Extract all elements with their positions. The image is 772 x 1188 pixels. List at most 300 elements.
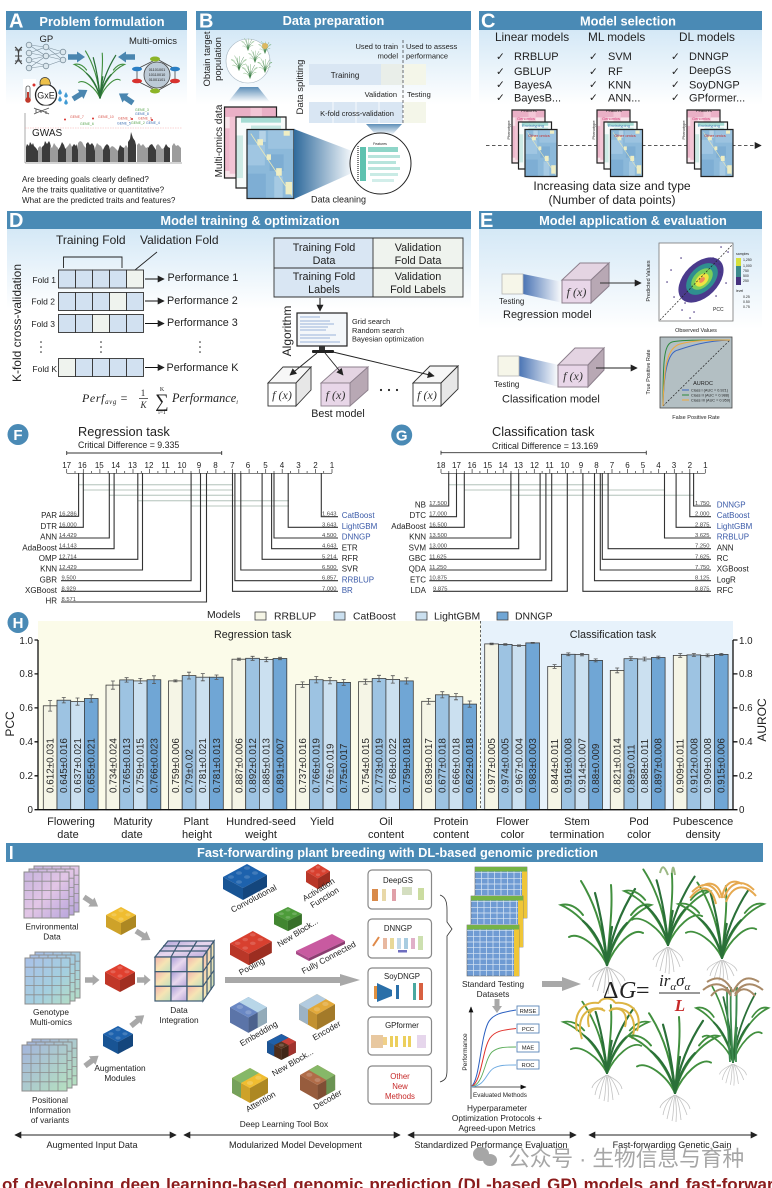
- data stack 1: Other omics: [528, 133, 550, 138]
- left rank values G: 11.250: [429, 565, 447, 571]
- method box other new methods: Other: [390, 1072, 410, 1081]
- right rank values G: 7.625: [695, 554, 710, 560]
- rank axis F: 17: [62, 461, 72, 470]
- x axis trait labels: date: [57, 829, 79, 841]
- method box SoyDNGP: [368, 968, 432, 1007]
- label obtain target population: Obtain target: [202, 31, 213, 86]
- method box DeepGS: [368, 870, 432, 909]
- formula perf avg: i: [236, 400, 238, 406]
- performance chart: Performance: [462, 1033, 469, 1071]
- genetic gain formula: =: [636, 978, 650, 1004]
- right axis ticks: [739, 636, 753, 816]
- right rank values G: [695, 501, 710, 592]
- scatter plot: PCC: [713, 307, 724, 313]
- method box SoyDNGP: SoyDNGP: [384, 972, 420, 981]
- fold row labels: Fold 3: [31, 319, 55, 329]
- regression model flow: Regression model: [503, 309, 592, 321]
- x axis trait labels: Protein: [434, 816, 468, 828]
- bar value labels: 0.737±0.016: [298, 738, 309, 793]
- left method names G: [391, 500, 427, 595]
- rank axis F: 16: [78, 461, 87, 470]
- data stack 2: Envirotyping: [608, 123, 630, 128]
- data stack 1: Features: [521, 108, 537, 113]
- main arrow: [225, 974, 360, 986]
- GWAS Manhattan plot: GENE_2: [131, 121, 145, 125]
- linear models list: BayesB...: [514, 92, 561, 104]
- performance labels: Performance 3: [167, 317, 238, 329]
- icon: GxE environment: [23, 77, 68, 106]
- title F: Regression task: [78, 424, 170, 439]
- bar value labels: 0.897±0.008: [654, 738, 665, 793]
- GWAS Manhattan plot: GENE_8: [135, 112, 149, 116]
- header B: [196, 10, 471, 32]
- panel A: problem formulation: [6, 10, 187, 208]
- x axis trait labels: Yield: [310, 816, 334, 828]
- header E: E: [480, 210, 493, 232]
- left method names G: GBC: [409, 554, 426, 563]
- bar value labels: 0.759±0.006: [171, 738, 182, 793]
- x axis trait labels: Plant: [183, 816, 209, 828]
- x axis trait labels: content: [368, 829, 404, 841]
- rank axis G: 10: [561, 461, 570, 470]
- x axis trait labels: Pod: [629, 816, 649, 828]
- performance labels: Performance K: [166, 362, 239, 374]
- bar value labels: 0.915±0.006: [717, 738, 728, 793]
- left method names G: DTC: [410, 511, 426, 520]
- linear models list: ✓: [496, 92, 505, 104]
- label data integration: [159, 1005, 199, 1025]
- population circle: [226, 38, 272, 83]
- right axis ticks: 0.4: [739, 737, 753, 748]
- scatter plot: 750: [743, 269, 749, 273]
- rank axis G: 11: [545, 461, 554, 470]
- rank axis F: [62, 461, 335, 473]
- fold data table: Validation: [395, 242, 441, 254]
- bar value labels: 0.781±0.013: [212, 738, 223, 793]
- badge F: [8, 424, 28, 445]
- left rank lines G: [429, 473, 567, 591]
- formula perf avg: K: [139, 400, 147, 410]
- badge G: G: [396, 428, 408, 444]
- bar value labels: 0.637±0.021: [73, 738, 84, 793]
- axis label k-fold: K-fold cross-validation: [10, 264, 24, 382]
- data stack 3: Features: [696, 108, 712, 113]
- left axis ticks: 0.2: [19, 771, 33, 782]
- x axis trait labels: date: [121, 829, 143, 841]
- splitting rows: [309, 40, 458, 124]
- stage labels: Augmented Input Data: [46, 1140, 138, 1150]
- left rank values F: [59, 511, 78, 603]
- optimization methods: [352, 317, 424, 344]
- left axis ticks: 0.4: [19, 737, 34, 748]
- rank axis G: 6: [625, 461, 630, 470]
- rank axis G: 7: [610, 461, 615, 470]
- legend: [207, 610, 553, 622]
- rank axis G: 13: [514, 461, 523, 470]
- linear models list: Linear models: [495, 30, 569, 44]
- scatter plot: 0.50: [743, 300, 750, 304]
- data stack 1: Envirotyping: [522, 123, 544, 128]
- rank axis G: 15: [483, 461, 493, 470]
- right method names F: [342, 511, 378, 595]
- critical difference F: [67, 440, 222, 455]
- formula perf avg: 1: [141, 388, 145, 398]
- questions text: [22, 175, 176, 205]
- bar value labels: 0.977±0.005: [487, 738, 498, 793]
- left method names F: OMP: [39, 554, 57, 563]
- data stack 3: Genomics: [692, 116, 710, 121]
- fold row labels: Fold K: [32, 364, 57, 374]
- y axis PCC: PCC: [3, 711, 17, 737]
- label standard testing datasets: Datasets: [477, 989, 509, 999]
- data stack 2: [591, 108, 642, 176]
- GWAS Manhattan plot: GWAS: [32, 128, 63, 139]
- ROC plot: Class I (AUC = 0.921): [691, 388, 729, 392]
- left rank values G: 11.625: [429, 554, 447, 560]
- linear models list: RRBLUP: [514, 51, 559, 63]
- bar value labels: 0.892±0.012: [248, 738, 259, 793]
- critical difference G: Critical Difference = 13.169: [492, 441, 598, 451]
- DL models list: ✓: [671, 66, 680, 78]
- ROC plot: False Positive Rate: [672, 415, 720, 421]
- bar value labels: 0.768±0.022: [388, 738, 399, 793]
- badge H: H: [13, 615, 23, 632]
- arrows to performance: [145, 279, 164, 368]
- label algorithm: Algorithm: [280, 306, 294, 356]
- label deep learning tool box: Deep Learning Tool Box: [240, 1119, 329, 1129]
- candidate model boxes: f (x): [272, 388, 292, 402]
- method box other new methods: New: [392, 1082, 408, 1091]
- bar value labels: 0.677±0.018: [438, 738, 449, 793]
- GWAS Manhattan plot: GENE_5: [117, 122, 131, 126]
- panel C: model selection: [479, 10, 762, 207]
- rank axis F: 14: [111, 461, 121, 470]
- icon: multi-omics network: 01101001: [149, 68, 165, 72]
- caption data size: (Number of data points): [548, 193, 676, 207]
- scatter plot: samples: [736, 252, 749, 256]
- bar value labels: 0.639±0.017: [424, 738, 435, 793]
- label genotype: Genotype: [33, 1007, 69, 1017]
- DL models list: [671, 30, 745, 104]
- bar value labels: 0.983±0.003: [528, 738, 539, 793]
- GWAS Manhattan plot: GENE_3: [135, 108, 149, 112]
- label positional: [29, 1095, 71, 1125]
- splitting rows: K-fold cross-validation: [320, 109, 394, 118]
- linear models list: ✓: [496, 51, 505, 63]
- rank axis F: 13: [128, 461, 137, 470]
- tool box labels: New Block...: [270, 1047, 315, 1078]
- bar value labels: 0.888±0.011: [640, 738, 651, 793]
- DL models list: GPformer...: [689, 92, 745, 104]
- right method names F: RFR: [342, 554, 358, 563]
- scatter plot: Observed Values: [675, 328, 717, 334]
- candidate model boxes: f (x): [417, 388, 437, 402]
- linear models list: ✓: [496, 79, 505, 91]
- environmental data grids: [24, 866, 79, 918]
- genetic gain formula: α: [670, 981, 676, 993]
- left method names G: KNN: [409, 532, 426, 542]
- right method names F: RRBLUP: [342, 576, 374, 584]
- dashed trend arrow: [486, 144, 761, 146]
- feature matrix lens: [350, 133, 411, 194]
- header A: [6, 10, 187, 32]
- left method names G: AdaBoost: [391, 522, 427, 531]
- header I: [6, 843, 763, 862]
- right rank values G: 8.875: [695, 586, 710, 592]
- header A: Problem formulation: [39, 14, 165, 29]
- panel I: fast-forwarding plant breeding: [6, 843, 768, 1150]
- method box DNNGP: DNNGP: [384, 924, 412, 933]
- clique bars F: [78, 485, 289, 506]
- rank axis F: 2: [313, 461, 318, 470]
- tool box labels: [229, 875, 358, 1114]
- tool box labels: Function: [308, 885, 341, 910]
- GWAS Manhattan plot: GENE_7: [70, 115, 84, 119]
- fold row labels: [31, 275, 57, 374]
- header E: [479, 210, 762, 232]
- task labels: Classification task: [570, 629, 657, 641]
- fold labels: Training Fold: [56, 233, 126, 247]
- header B: Data preparation: [283, 13, 385, 28]
- rank axis F: 7: [230, 461, 235, 470]
- linear models list: [495, 30, 569, 104]
- left method names F: AdaBoost: [22, 544, 58, 552]
- splitting rows: performance: [406, 52, 448, 60]
- label environmental data: [25, 922, 79, 942]
- label multi-omics data: Multi-omics data: [214, 104, 225, 177]
- left rank values G: 17.500: [429, 501, 447, 507]
- label genotype: [30, 1007, 72, 1027]
- genetic gain formula: ir: [659, 971, 670, 990]
- fold labels: [56, 233, 218, 247]
- linear models list: GBLUP: [514, 66, 551, 78]
- bar value labels: 0.75±0.017: [339, 744, 350, 793]
- DL models list: SoyDNGP: [689, 80, 740, 92]
- performance labels: Performance 1: [168, 272, 238, 284]
- method box GPformer: GPformer: [385, 1021, 419, 1030]
- legend: Models: [207, 610, 240, 621]
- bar value labels: 0.622±0.018: [465, 738, 476, 793]
- legend: LightGBM: [434, 612, 480, 622]
- genetic gain formula: L: [674, 996, 685, 1015]
- left rank values G: 16.500: [429, 522, 447, 528]
- label GP: GP: [40, 34, 53, 45]
- right rank values F: 4.643: [322, 544, 337, 550]
- left method names F: KNN: [40, 564, 57, 574]
- bar value labels: 0.967±0.004: [514, 738, 525, 793]
- right rank values F: 3.643: [322, 522, 337, 528]
- bar value labels: 0.759±0.018: [402, 738, 413, 793]
- splitting rows: Training: [331, 71, 359, 80]
- data stack 2: Genomics: [602, 116, 620, 121]
- bar value labels: [46, 738, 728, 793]
- label augmentation modules: Augmentation: [94, 1063, 146, 1073]
- header C: [479, 10, 762, 32]
- optimization methods: Random search: [352, 326, 404, 335]
- fold data table: Training Fold: [293, 242, 355, 254]
- x axis trait labels: weight: [244, 829, 277, 841]
- header D: D: [9, 210, 23, 232]
- left method names G: ETC: [410, 576, 426, 584]
- genetic gain formula: σ: [676, 971, 685, 990]
- regression model flow: f (x): [567, 285, 586, 299]
- rank axis G: 14: [499, 461, 508, 470]
- right axis ticks: 0: [739, 805, 745, 816]
- scatter plot: 1,250: [743, 258, 752, 262]
- axes: [34, 640, 738, 810]
- label hyperparameter: Agreed-upon Metrics: [458, 1123, 536, 1133]
- label positional: Positional: [32, 1095, 68, 1105]
- header C: Model selection: [580, 14, 676, 28]
- bar value labels: 0.916±0.008: [564, 738, 575, 793]
- right rank values G: 2.000: [695, 512, 710, 518]
- x axis trait labels: Flower: [496, 816, 529, 828]
- right method names G: DNNGP: [717, 500, 746, 510]
- data stack 1: Genomics: [517, 116, 535, 121]
- performance chart: RMSE: [520, 1009, 537, 1015]
- fold rows: [58, 270, 144, 376]
- fold labels: Validation Fold: [140, 233, 218, 247]
- optimization methods: Grid search: [352, 317, 390, 326]
- ROC plot: [646, 337, 732, 421]
- right method names F: CatBoost: [342, 511, 375, 520]
- tool box labels: Decoder: [311, 1087, 344, 1112]
- optimization methods: Bayesian optimization: [352, 334, 424, 344]
- label positional: of variants: [31, 1115, 69, 1125]
- rank axis G: 17: [452, 461, 461, 470]
- right rank values G: 3.625: [695, 533, 710, 539]
- x axis trait labels: termination: [550, 829, 604, 841]
- rank axis G: 3: [672, 461, 677, 470]
- label positional: Information: [29, 1105, 71, 1115]
- performance chart: [462, 1006, 539, 1099]
- data stack 3: [681, 108, 733, 176]
- fold data table: [274, 238, 463, 297]
- icon: GxE environment: GxE: [37, 90, 55, 100]
- label genotype: Multi-omics: [30, 1017, 72, 1027]
- rank axis G: 4: [656, 461, 661, 470]
- tool box labels: New Block...: [275, 916, 320, 949]
- ROC plot: True Positive Rate: [646, 349, 652, 395]
- GWAS Manhattan plot: GENE_6: [80, 122, 94, 126]
- scatter plot: 0.25: [743, 295, 750, 299]
- left method names F: XGBoost: [25, 586, 58, 595]
- right method names F: DNNGP: [342, 532, 371, 542]
- ML models list: [588, 30, 645, 104]
- label augmentation modules: [94, 1063, 146, 1083]
- method box other new methods: Methods: [385, 1092, 415, 1101]
- rank axis G: 18: [437, 461, 446, 470]
- formula perf avg: K: [160, 387, 165, 393]
- stage labels: Standardized Performance Evaluation: [414, 1140, 568, 1150]
- splitting rows: model: [378, 52, 398, 60]
- right rank values G: 7.750: [695, 565, 710, 571]
- tool box bricks: [223, 864, 345, 1103]
- rank axis G: 12: [530, 461, 539, 470]
- left rank values G: 10.875: [429, 576, 447, 582]
- splitting rows: Used to train: [355, 42, 398, 51]
- performance labels: Performance 2: [167, 295, 238, 307]
- legend: CatBoost: [353, 612, 396, 622]
- right rank values F: 7.000: [322, 586, 337, 592]
- bar value labels: 0.914±0.007: [577, 738, 588, 793]
- task labels: Regression task: [214, 629, 292, 641]
- ML models list: SVM: [608, 51, 632, 63]
- bar value labels: 0.885±0.013: [262, 738, 273, 793]
- left rank values F: 8.571: [62, 597, 76, 603]
- rank axis G: 16: [468, 461, 477, 470]
- ellipsis dots: [40, 341, 201, 353]
- icon: multi-omics network: 01001101: [149, 78, 165, 82]
- gray arrow to plants: [542, 977, 581, 991]
- ML models list: ✓: [589, 92, 598, 104]
- scatter plot: 500: [743, 274, 749, 278]
- fold data table: Labels: [308, 284, 341, 296]
- ML models list: ✓: [589, 79, 598, 91]
- badge F: F: [13, 427, 23, 444]
- right rank lines G: [583, 473, 711, 591]
- right method names G: RFC: [717, 586, 733, 595]
- genetic gain formula: G: [619, 978, 636, 1004]
- performance chart: Evaluated Methods: [473, 1092, 527, 1099]
- linear models list: BayesA: [514, 80, 553, 92]
- data stack 3: Phenotype: [681, 120, 686, 140]
- header I: Fast-forwarding plant breeding with DL-based genomic prediction: [197, 845, 598, 860]
- right method names F: LightGBM: [342, 522, 378, 531]
- left rank values G: 13.500: [429, 533, 447, 539]
- ML models list: ✓: [589, 66, 598, 78]
- rank axis F: 3: [296, 461, 301, 470]
- label data integration: Data: [170, 1005, 188, 1015]
- panel G: classification critical difference diagram: [391, 424, 753, 595]
- genetic gain formula: Δ: [603, 978, 618, 1004]
- right rank values F: 6.500: [322, 565, 337, 571]
- fold row labels: Fold 1: [32, 275, 56, 285]
- bar value labels: 0.891±0.007: [275, 738, 286, 793]
- right rank values F: 6.857: [322, 576, 337, 582]
- left rank values F: 14.143: [59, 544, 77, 550]
- down arrow: [492, 999, 502, 1013]
- left axis ticks: 0.6: [19, 703, 34, 714]
- right rank values F: 1.643: [322, 512, 337, 518]
- bar value labels: 0.844±0.011: [550, 738, 561, 793]
- genetic gain formula: [603, 971, 700, 1015]
- bracket: [64, 252, 157, 270]
- formula perf avg: [81, 387, 238, 416]
- right method names F: SVR: [342, 564, 358, 574]
- right method names F: BR: [342, 586, 353, 595]
- bar value labels: 0.974±0.005: [501, 738, 512, 793]
- multi-omics heatmap stack: [224, 107, 294, 198]
- bar value labels: 0.765±0.013: [122, 738, 133, 793]
- data stack 2: Features: [606, 108, 622, 113]
- performance chart: MAE: [522, 1046, 534, 1052]
- icon: multi-omics network: [132, 56, 180, 94]
- left rank values F: 8.929: [62, 586, 76, 592]
- clique bars G: [449, 485, 694, 495]
- chart backgrounds: [38, 621, 733, 809]
- rank axis G: 5: [641, 461, 646, 470]
- left method names G: SVM: [409, 544, 426, 552]
- fold row labels: Fold 2: [31, 296, 55, 306]
- x axis trait labels: [47, 816, 733, 841]
- left method names G: NB: [415, 500, 426, 510]
- left method names F: HR: [45, 596, 57, 606]
- genotype grids: [25, 952, 80, 1004]
- ML models list: RF: [608, 66, 623, 78]
- fold data table: Data: [313, 255, 335, 267]
- fold data table: Fold Labels: [390, 284, 447, 296]
